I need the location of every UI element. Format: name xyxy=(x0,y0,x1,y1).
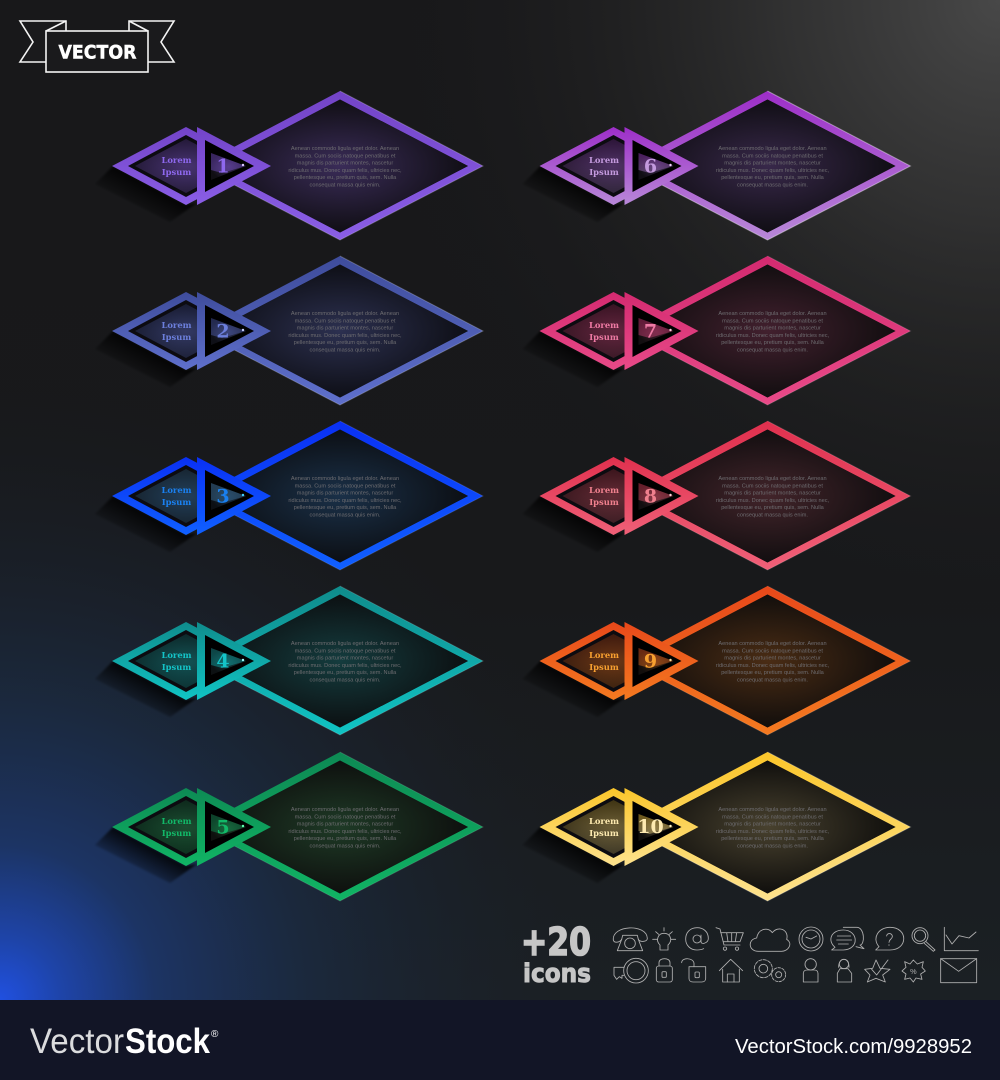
icon: discount burst: % xyxy=(910,967,917,976)
item 10: massa. Cum sociis natoque penatibus et xyxy=(722,814,823,820)
icon: at sign xyxy=(686,928,708,950)
label: +20 icons xyxy=(521,920,591,989)
icon: speech bubbles xyxy=(831,927,864,950)
item 4 xyxy=(95,586,483,735)
label: +20 icons: +20 xyxy=(521,920,591,964)
item 6: consequat massa quis enim. xyxy=(737,182,808,188)
item 3: Ipsum xyxy=(162,497,191,507)
item 3: ridiculus mus. Donec quam felis, ultricies nec, xyxy=(288,498,402,504)
item 7 xyxy=(522,256,910,405)
item 3: consequat massa quis enim. xyxy=(310,512,381,518)
item 3: Lorem xyxy=(161,485,192,495)
item 10: pellentesque eu, pretium quis, sem. Nulla xyxy=(721,836,825,842)
icon: line chart xyxy=(944,927,978,951)
item 2: pellentesque eu, pretium quis, sem. Nulla xyxy=(294,340,397,346)
item 5: ridiculus mus. Donec quam felis, ultricies nec, xyxy=(288,829,402,835)
item 5: Lorem xyxy=(161,816,192,826)
item 7: Ipsum xyxy=(589,332,619,342)
item 10: Aenean commodo ligula eget dolor. Aenean xyxy=(718,807,827,813)
item 4: consequat massa quis enim. xyxy=(310,678,381,684)
item 8: magnis dis parturient montes, nascetur xyxy=(724,491,821,497)
item 10: ridiculus mus. Donec quam felis, ultricies nec, xyxy=(716,829,830,835)
item 4: Ipsum xyxy=(162,662,191,672)
item 10: Lorem xyxy=(589,816,619,826)
item 4: massa. Cum sociis natoque penatibus et xyxy=(295,648,396,654)
item 7: magnis dis parturient montes, nascetur xyxy=(724,326,821,332)
item 1: 1 xyxy=(216,156,230,178)
item 2: Ipsum xyxy=(162,332,191,342)
item 5: pellentesque eu, pretium quis, sem. Nulla xyxy=(294,836,397,842)
item 5: consequat massa quis enim. xyxy=(310,844,381,850)
item 2: 2 xyxy=(216,320,230,342)
item 5 xyxy=(95,752,483,901)
icon: gears xyxy=(754,960,786,982)
icon: house xyxy=(719,959,743,982)
item 4: magnis dis parturient montes, nascetur xyxy=(297,656,393,662)
item 9: consequat massa quis enim. xyxy=(737,678,808,684)
item 6: Ipsum xyxy=(589,167,619,177)
item 6: 6 xyxy=(644,156,657,178)
icon set xyxy=(613,927,978,983)
item 5: magnis dis parturient montes, nascetur xyxy=(297,822,393,828)
item 1: Aenean commodo ligula eget dolor. Aenean xyxy=(291,146,399,152)
item 4: Aenean commodo ligula eget dolor. Aenean xyxy=(291,641,399,647)
icon: telephone xyxy=(613,928,647,951)
item 2 xyxy=(95,256,483,405)
item 2: magnis dis parturient montes, nascetur xyxy=(297,326,393,332)
item 6 xyxy=(522,91,910,240)
item 8: massa. Cum sociis natoque penatibus et xyxy=(722,483,823,489)
label: +20 icons: icons xyxy=(523,959,591,989)
item 8: Aenean commodo ligula eget dolor. Aenean xyxy=(718,476,827,482)
item 8: 8 xyxy=(644,486,657,508)
item 10: Ipsum xyxy=(589,828,619,838)
item 3: 3 xyxy=(216,486,230,508)
item 5: massa. Cum sociis natoque penatibus et xyxy=(295,814,396,820)
item 3: pellentesque eu, pretium quis, sem. Nulla xyxy=(294,505,397,511)
item 1: Ipsum xyxy=(162,167,191,177)
item 9: pellentesque eu, pretium quis, sem. Nulla xyxy=(721,670,825,676)
item 9: ridiculus mus. Donec quam felis, ultricies nec, xyxy=(716,663,830,669)
item 8: ridiculus mus. Donec quam felis, ultricies nec, xyxy=(716,498,830,504)
item 9: Lorem xyxy=(589,650,619,660)
item 6: massa. Cum sociis natoque penatibus et xyxy=(722,153,823,159)
footer url: VectorStock.com/9928952 xyxy=(735,1036,972,1058)
item 3 xyxy=(95,421,483,570)
item 4: 4 xyxy=(216,650,230,672)
item 6: pellentesque eu, pretium quis, sem. Nulla xyxy=(721,175,825,181)
icon: clock xyxy=(799,927,823,951)
item 6: magnis dis parturient montes, nascetur xyxy=(724,161,821,167)
item 2: consequat massa quis enim. xyxy=(310,348,381,354)
item 5: Ipsum xyxy=(162,828,191,838)
item 9: Aenean commodo ligula eget dolor. Aenean xyxy=(718,641,827,647)
item 9: 9 xyxy=(644,650,657,672)
icon: padlock closed xyxy=(656,959,672,982)
footer logo: ® xyxy=(211,1029,219,1040)
item 5: Aenean commodo ligula eget dolor. Aenean xyxy=(291,807,399,813)
item 1: magnis dis parturient montes, nascetur xyxy=(297,161,393,167)
item 1: Lorem xyxy=(161,155,192,165)
icon: light bulb xyxy=(653,928,676,950)
item 8 xyxy=(522,421,910,570)
item 7: Lorem xyxy=(589,320,619,330)
item 7: 7 xyxy=(644,320,657,342)
item 6: Lorem xyxy=(589,155,619,165)
footer logo: Vector xyxy=(30,1022,124,1061)
footer logo xyxy=(30,1022,219,1061)
item 9: massa. Cum sociis natoque penatibus et xyxy=(722,648,823,654)
item 7: consequat massa quis enim. xyxy=(737,348,808,354)
item 8: consequat massa quis enim. xyxy=(737,512,808,518)
item 7: Aenean commodo ligula eget dolor. Aenean xyxy=(718,311,827,317)
item 6: Aenean commodo ligula eget dolor. Aenean xyxy=(718,146,827,152)
item 9: Ipsum xyxy=(589,662,619,672)
icon: shopping cart xyxy=(716,928,743,950)
icon: magnifier xyxy=(912,928,935,951)
icon: man xyxy=(803,959,818,982)
item 9 xyxy=(522,586,910,735)
item 5: 5 xyxy=(216,816,230,838)
item 1 xyxy=(95,91,483,240)
icon: padlock open xyxy=(682,959,706,982)
item 8: pellentesque eu, pretium quis, sem. Nulla xyxy=(721,505,825,511)
item 10: 10 xyxy=(637,816,664,838)
item 8: Lorem xyxy=(589,485,619,495)
icon: key xyxy=(614,958,648,983)
icon: woman xyxy=(837,959,852,982)
item 2: massa. Cum sociis natoque penatibus et xyxy=(295,318,396,324)
item 7: pellentesque eu, pretium quis, sem. Nulla xyxy=(721,340,825,346)
item 1: consequat massa quis enim. xyxy=(310,182,381,188)
item 2: Aenean commodo ligula eget dolor. Aenean xyxy=(291,311,399,317)
icon: envelope xyxy=(941,959,977,983)
item 7: massa. Cum sociis natoque penatibus et xyxy=(722,318,823,324)
item 4: ridiculus mus. Donec quam felis, ultricies nec, xyxy=(288,663,402,669)
item 9: magnis dis parturient montes, nascetur xyxy=(724,656,821,662)
item 10 xyxy=(522,752,910,901)
item 10: magnis dis parturient montes, nascetur xyxy=(724,822,821,828)
item 1: ridiculus mus. Donec quam felis, ultricies nec, xyxy=(288,168,402,174)
item 7: ridiculus mus. Donec quam felis, ultricies nec, xyxy=(716,333,830,339)
item 3: magnis dis parturient montes, nascetur xyxy=(297,491,393,497)
icon: cloud xyxy=(750,929,790,951)
item 6: ridiculus mus. Donec quam felis, ultricies nec, xyxy=(716,168,830,174)
icon: star with check xyxy=(865,960,890,982)
item 3: Aenean commodo ligula eget dolor. Aenean xyxy=(291,476,399,482)
footer bar xyxy=(0,1000,1000,1080)
item 2: Lorem xyxy=(161,320,192,330)
item 10: consequat massa quis enim. xyxy=(737,844,808,850)
item 8: Ipsum xyxy=(589,497,619,507)
item 2: ridiculus mus. Donec quam felis, ultricies nec, xyxy=(288,333,402,339)
item 1: pellentesque eu, pretium quis, sem. Nulla xyxy=(294,175,397,181)
item 1: massa. Cum sociis natoque penatibus et xyxy=(295,153,396,159)
badge: vector ribbon: VECTOR xyxy=(58,42,136,64)
item 3: massa. Cum sociis natoque penatibus et xyxy=(295,483,396,489)
item 4: pellentesque eu, pretium quis, sem. Nulla xyxy=(294,670,397,676)
footer logo: Stock xyxy=(125,1022,210,1061)
icon: question bubble xyxy=(876,927,904,950)
item 4: Lorem xyxy=(161,650,192,660)
badge: vector ribbon xyxy=(20,21,174,72)
icon: discount burst xyxy=(902,960,925,982)
